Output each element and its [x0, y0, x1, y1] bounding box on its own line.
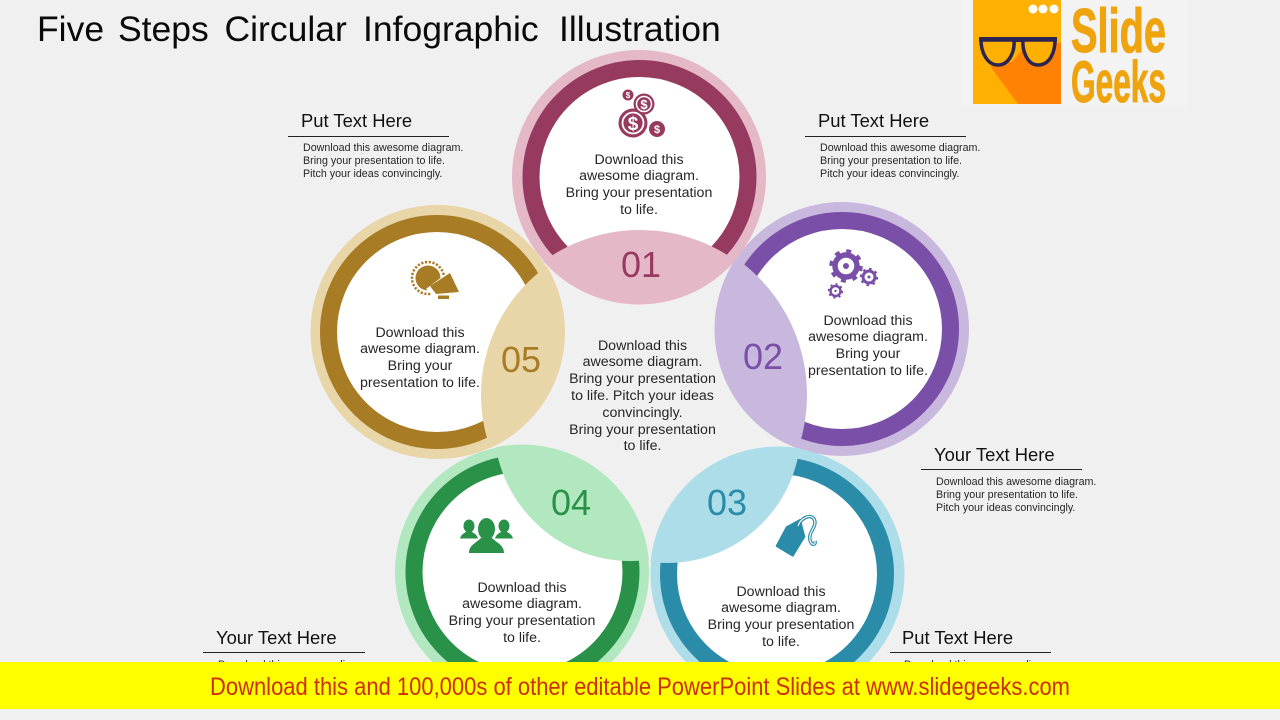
- text: step 01 description: to life.: [620, 202, 658, 218]
- callout: top left: Bring your presentation to life.: [303, 155, 445, 167]
- icon: coins: $: [654, 124, 660, 136]
- callout: top left: [288, 110, 463, 180]
- callout: top left: Pitch your ideas convincingly.: [303, 168, 442, 180]
- icon: price tag: [777, 517, 815, 556]
- callout: top right: [805, 110, 980, 180]
- text: center description: to life. Pitch your ideas: [571, 388, 714, 404]
- icon: coins: $: [640, 97, 648, 112]
- text: step 05 description: Download this: [375, 325, 465, 341]
- panel: step 02: [714, 202, 970, 456]
- callout: middle right: Download this awesome diagram.: [936, 476, 1096, 488]
- icon: gears: [829, 251, 877, 298]
- callout: middle right: Your Text Here: [934, 444, 1055, 465]
- number 03: 03: [707, 482, 747, 523]
- text: step 05 description: presentation to life.: [360, 375, 480, 391]
- callout: bottom left: Your Text Here: [216, 627, 337, 648]
- panel: step 05: [310, 204, 565, 460]
- text: step 03 description: awesome diagram.: [721, 600, 841, 616]
- text: step 05 description: Bring your: [388, 358, 453, 374]
- title: Circular: [224, 9, 347, 49]
- text: center description: convincingly.: [602, 405, 683, 421]
- text: step 02 description: Download this: [823, 313, 913, 329]
- text: center description: to life.: [624, 438, 661, 454]
- callout: middle right: Bring your presentation to life.: [936, 489, 1078, 501]
- text: step 02 description: awesome diagram.: [808, 329, 928, 345]
- text: step 01 description: awesome diagram.: [579, 168, 699, 184]
- callout: bottom right: [890, 627, 1064, 671]
- icon: coins: [618, 90, 665, 138]
- text: step 03 description: to life.: [762, 634, 800, 650]
- icon: people: [460, 518, 513, 553]
- text: step 04 description: Bring your presentation: [449, 613, 595, 629]
- text: step 02 description: presentation to life.: [808, 363, 928, 379]
- callout: middle right: [921, 444, 1096, 514]
- callout: bottom left: Download this awesome diagram.: [218, 659, 378, 671]
- banner: download promo: Download this and 100,000s of other editable PowerPoint Slides at www.slidegeeks.com: [210, 673, 1070, 701]
- text: center description: Download this: [598, 338, 687, 354]
- panel: step 01: [512, 50, 766, 304]
- callout: bottom left: [203, 627, 378, 671]
- number 01: 01: [621, 244, 661, 285]
- title: Five: [37, 9, 104, 49]
- text: step 03 description: Bring your presentation: [708, 617, 854, 633]
- title: Infographic: [363, 9, 539, 49]
- logo: Slide Geeks: Geeks: [1071, 50, 1166, 115]
- text: step 04 description: Download this: [477, 580, 567, 596]
- callout: top right: Pitch your ideas convincingly.: [820, 168, 959, 180]
- panel: step 03: [650, 446, 904, 662]
- text: step 02 description: Bring your: [836, 346, 901, 362]
- banner: download promo: [0, 662, 1280, 709]
- icon: coins: $: [626, 91, 631, 100]
- text: center description: Bring your presentation: [569, 371, 716, 387]
- text: center description: Bring your presentation: [569, 422, 716, 438]
- text: step 05 description: awesome diagram.: [360, 341, 480, 357]
- logo: Slide Geeks: [961, 0, 1188, 115]
- callout: bottom right: Put Text Here: [902, 627, 1013, 648]
- text: step 04 description: awesome diagram.: [462, 596, 582, 612]
- callout: top left: Put Text Here: [301, 110, 412, 131]
- text: center description: awesome diagram.: [583, 354, 702, 370]
- text: step 04 description: to life.: [503, 630, 541, 646]
- title: Illustration: [559, 9, 721, 49]
- callout: top right: Bring your presentation to life.: [820, 155, 962, 167]
- icon: coins: $: [628, 114, 639, 135]
- number 05: 05: [501, 339, 541, 380]
- text: step 03 description: Download this: [736, 584, 826, 600]
- callout: top right: Download this awesome diagram.: [820, 142, 980, 154]
- text: step 01 description: Bring your presentation: [566, 185, 712, 201]
- number 02: 02: [743, 336, 783, 377]
- text: step 01 description: Download this: [594, 152, 684, 168]
- title: Steps: [118, 9, 209, 49]
- panel: step 04: [395, 444, 649, 662]
- callout: top left: Download this awesome diagram.: [303, 142, 463, 154]
- callout: bottom right: Download this awesome diagram.: [904, 659, 1064, 671]
- number 04: 04: [551, 482, 591, 523]
- callout: middle right: Pitch your ideas convincingly.: [936, 502, 1075, 514]
- callout: top right: Put Text Here: [818, 110, 929, 131]
- icon: megaphone and seal: [412, 262, 462, 299]
